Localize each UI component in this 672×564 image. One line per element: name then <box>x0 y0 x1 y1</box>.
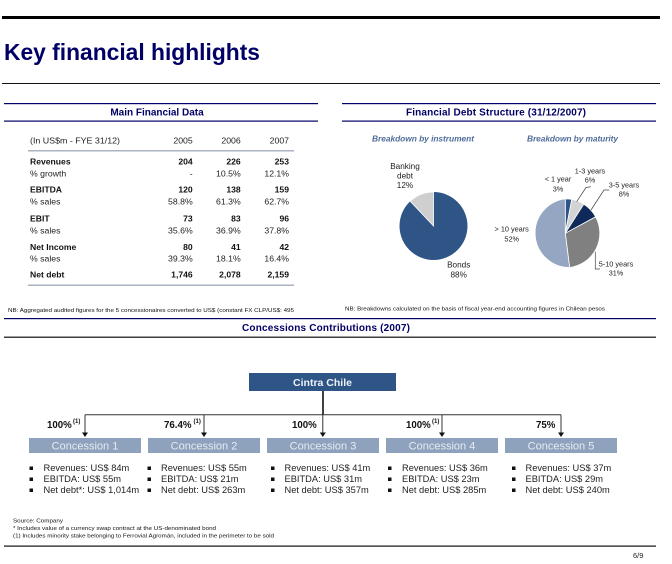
concession 3: Revenues: US$ 41m <box>284 463 371 473</box>
concession 2: EBITDA: US$ 21m <box>161 474 239 484</box>
pie chart: maturity: 52% <box>504 235 520 244</box>
financial table: % sales <box>30 254 61 264</box>
pie chart: instrument <box>390 162 470 280</box>
pie chart: instrument: Bonds <box>447 261 470 270</box>
title: Key financial highlights <box>4 39 260 65</box>
stake percentages: 100% <box>292 420 317 431</box>
concession 3: EBITDA: US$ 31m <box>284 474 362 484</box>
concession 5 <box>505 438 617 495</box>
subheading: breakdown by instrument: Breakdown by instrument <box>372 134 475 144</box>
page number: 6/9 <box>633 551 643 560</box>
concession 3: Net debt: US$ 357m <box>284 485 369 495</box>
concession 1: Net debt*: US$ 1,014m <box>44 485 139 495</box>
pie chart: instrument: debt <box>397 172 414 180</box>
pie chart: maturity <box>495 167 640 278</box>
pie chart: maturity: > 10 years <box>495 225 529 234</box>
pie chart: maturity: < 1 year <box>545 175 572 184</box>
connectors and arrows <box>82 391 564 437</box>
stake percentages: 75% <box>536 420 556 431</box>
financial table: 2,159 <box>267 270 289 280</box>
concession 2: Concession 2 <box>171 440 237 452</box>
financial table: 96 <box>279 214 289 224</box>
financial table: 73 <box>183 214 193 224</box>
stake percentages: 100% <box>406 420 431 431</box>
financial table: 12.1% <box>264 169 289 179</box>
stake percentages: 76.4% <box>164 420 192 431</box>
financial table: 36.9% <box>216 226 241 236</box>
footnotes: (1) Includes minority stake belonging to Ferrovial Agromán, included in the perimeter to be sold <box>13 534 274 540</box>
concession 1: EBITDA: US$ 55m <box>44 474 121 484</box>
financial table: 10.5% <box>216 169 241 179</box>
pie chart: maturity: 6% <box>585 176 596 185</box>
financial table: 35.6% <box>168 226 193 236</box>
stake percentages: 100% <box>47 420 72 431</box>
concession 5: Revenues: US$ 37m <box>526 463 612 473</box>
financial table: Net debt <box>30 270 65 280</box>
financial table: 2006 <box>221 136 241 146</box>
note: main financial data: NB: Aggregated audited figures for the 5 concessionaires converted to US$ (constant FX CLP/US$: 495 <box>8 308 294 314</box>
financial table: 120 <box>178 185 193 195</box>
financial table: 80 <box>183 242 193 252</box>
panel: financial debt structure <box>342 103 656 312</box>
financial table: 58.8% <box>168 197 193 207</box>
financial table: 2,078 <box>219 270 241 280</box>
financial table: Net Income <box>30 242 77 252</box>
pie chart: maturity: 1-3 years <box>575 167 606 176</box>
concession 1: Concession 1 <box>52 440 118 452</box>
pie chart: maturity: 3-5 years <box>609 181 640 190</box>
concession 4: Concession 4 <box>409 440 475 452</box>
financial table: % sales <box>30 226 61 236</box>
heading: main financial data: Main Financial Data <box>110 108 204 118</box>
pie chart: instrument: Banking <box>390 162 420 171</box>
financial table: EBITDA <box>30 185 62 195</box>
footnotes: Source: Company <box>13 519 63 525</box>
box: Cintra Chile: Cintra Chile <box>293 377 352 389</box>
financial table: 253 <box>275 157 289 167</box>
stake percentages: (1) <box>194 419 201 425</box>
pie chart: maturity: 31% <box>609 269 624 278</box>
footnotes: * Includes value of a currency swap contract at the US-denominated bond <box>13 526 216 532</box>
box: Cintra Chile <box>249 373 396 391</box>
concession 2: Net debt: US$ 263m <box>161 485 245 495</box>
financial table <box>28 136 294 286</box>
pie chart: instrument: 88% <box>451 271 467 280</box>
financial table: 18.1% <box>216 254 241 264</box>
financial table: 204 <box>178 157 193 167</box>
concession 2 <box>148 438 260 495</box>
pie chart: maturity: 5-10 years <box>599 260 634 269</box>
concession 5: Net debt: US$ 240m <box>526 485 610 495</box>
panel: main financial data <box>4 103 318 314</box>
concession 3: Concession 3 <box>290 440 356 452</box>
financial table: 16.4% <box>264 254 289 264</box>
concession 4: Net debt: US$ 285m <box>402 485 486 495</box>
org chart: concessions <box>29 373 617 495</box>
financial table: (In US$m - FYE 31/12) <box>30 136 120 146</box>
pie chart: maturity: 8% <box>619 190 630 199</box>
financial table: 83 <box>231 214 241 224</box>
concession 4: EBITDA: US$ 23m <box>402 474 480 484</box>
heading: financial debt structure: Financial Debt Structure (31/12/2007) <box>406 108 586 118</box>
pie chart: instrument: 12% <box>397 181 413 190</box>
financial table: Revenues <box>30 157 71 167</box>
financial table: % growth <box>30 169 66 179</box>
concession 4 <box>386 438 498 495</box>
financial table: 62.7% <box>264 197 289 207</box>
financial table: 41 <box>231 242 241 252</box>
financial table: 61.3% <box>216 197 241 207</box>
financial table: 1,746 <box>171 270 193 280</box>
concession 5: Concession 5 <box>528 440 594 452</box>
financial table: EBIT <box>30 214 50 224</box>
concession 2: Revenues: US$ 55m <box>161 463 247 473</box>
heading: concessions contributions: Concessions Contributions (2007) <box>242 323 410 334</box>
subheading: breakdown by maturity: Breakdown by maturity <box>527 134 618 144</box>
concession 1 <box>29 438 141 495</box>
financial table: 39.3% <box>168 254 193 264</box>
financial table: 2005 <box>173 136 193 146</box>
financial table: - <box>190 169 193 179</box>
financial table: 37.8% <box>264 226 289 236</box>
footnotes <box>13 519 274 540</box>
stake percentages: (1) <box>73 419 80 425</box>
concession 3 <box>267 438 379 495</box>
concession 5: EBITDA: US$ 29m <box>526 474 603 484</box>
note: debt structure: NB: Breakdowns calculated on the basis of fiscal year-end accounting figures in Chilean pesos <box>345 306 605 312</box>
concession 1: Revenues: US$ 84m <box>44 463 130 473</box>
stake percentages: (1) <box>432 419 439 425</box>
concession 4: Revenues: US$ 36m <box>402 463 488 473</box>
financial table: 138 <box>226 185 241 195</box>
pie chart: maturity: 3% <box>553 185 564 194</box>
stake percentages <box>47 419 556 431</box>
financial table: 226 <box>226 157 241 167</box>
financial table: 42 <box>279 242 289 252</box>
financial table: 2007 <box>270 136 289 146</box>
financial table: 159 <box>275 185 289 195</box>
financial table: % sales <box>30 197 61 207</box>
